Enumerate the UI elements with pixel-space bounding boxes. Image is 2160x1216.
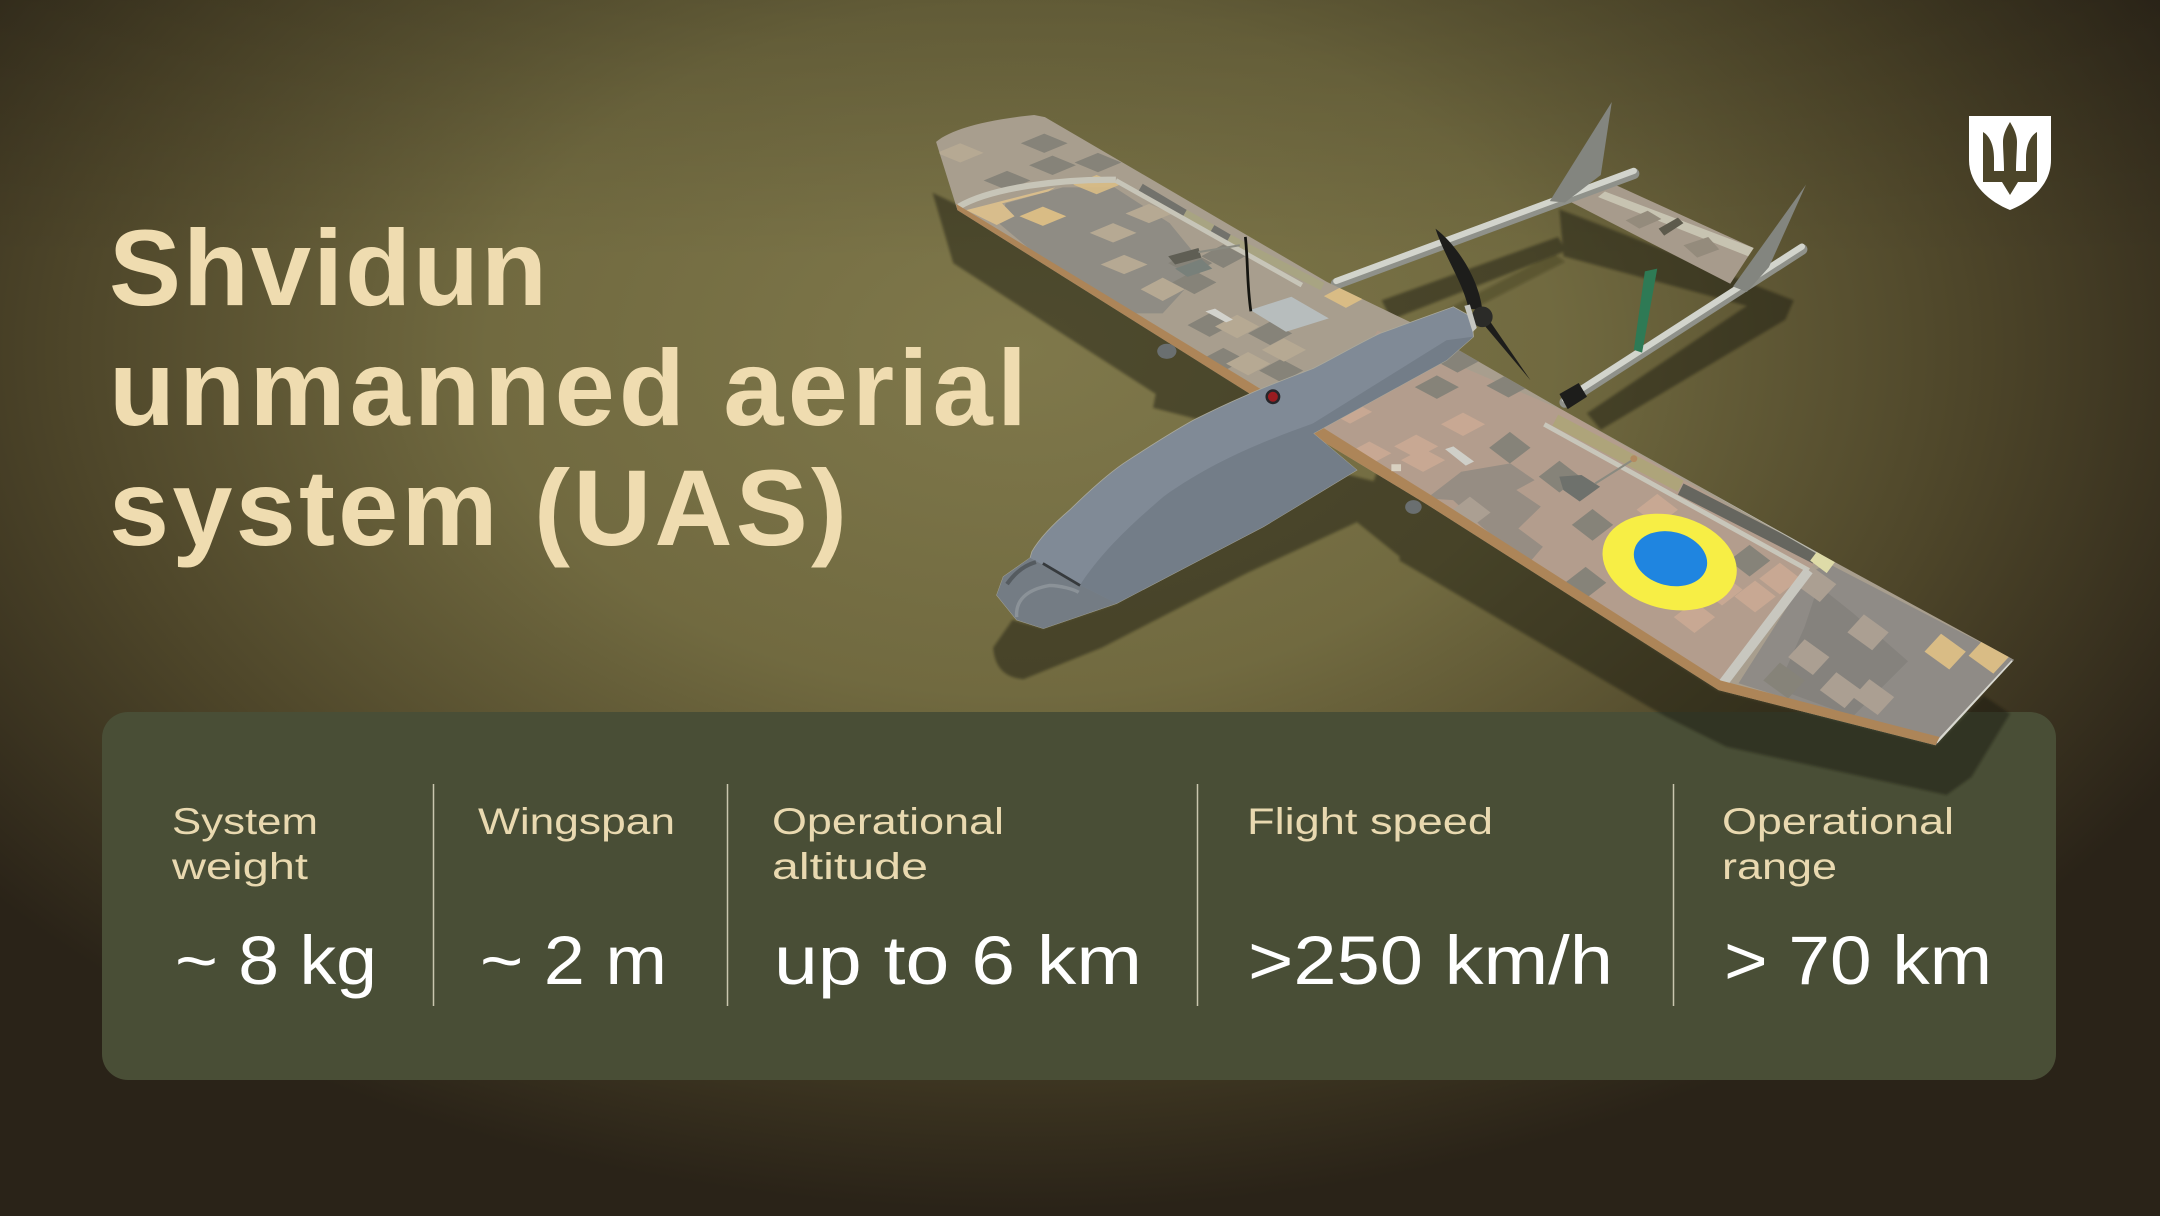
title: system (UAS) <box>109 447 847 568</box>
spec: operational altitude: Operational <box>772 801 1004 842</box>
title: Shvidun <box>109 207 547 328</box>
spec: operational range: > 70 km <box>1724 922 1992 999</box>
propeller <box>1435 229 1531 380</box>
spec: wingspan: Wingspan <box>478 801 675 842</box>
tan arc on left wing <box>966 187 1055 225</box>
spec: operational range: Operational <box>1722 801 1954 842</box>
spec: system weight: weight <box>171 846 309 887</box>
drone illustration <box>933 102 2014 795</box>
tail fins <box>1550 102 1806 292</box>
nose pod <box>997 558 1117 628</box>
spec: operational altitude: altitude <box>772 846 928 887</box>
wing camouflage <box>984 134 1805 698</box>
fuselage <box>997 307 1473 628</box>
drone ground shadow <box>933 193 2010 795</box>
roundel <box>1592 500 1747 624</box>
spec: flight speed: Flight speed <box>1247 801 1493 842</box>
title <box>109 207 1027 568</box>
panel: specifications <box>102 712 2056 1080</box>
spec: flight speed: >250 km/h <box>1248 922 1613 999</box>
spec: system weight <box>171 801 377 999</box>
sensor <box>1267 391 1279 403</box>
spec: operational range: range <box>1722 846 1837 887</box>
tailplane <box>1566 183 1754 284</box>
spec: wingspan: ~ 2 m <box>480 922 667 999</box>
spec: operational range <box>1722 801 1992 999</box>
spec: operational altitude <box>772 801 1142 999</box>
tail booms <box>1336 171 1802 402</box>
wing fittings <box>1157 237 1637 514</box>
wing control lines <box>1555 420 1681 486</box>
icon: trident shield <box>1969 116 2051 210</box>
title: unmanned aerial <box>109 327 1027 448</box>
spec: flight speed <box>1247 801 1613 999</box>
spec: system weight: System <box>172 801 318 842</box>
green antenna <box>1634 269 1657 353</box>
wing leading edge <box>956 204 1940 745</box>
servo <box>1559 383 1587 409</box>
spec: system weight: ~ 8 kg <box>175 922 377 999</box>
spec: operational altitude: up to 6 km <box>774 922 1142 999</box>
wing <box>936 115 2014 745</box>
spec: wingspan <box>478 801 675 999</box>
